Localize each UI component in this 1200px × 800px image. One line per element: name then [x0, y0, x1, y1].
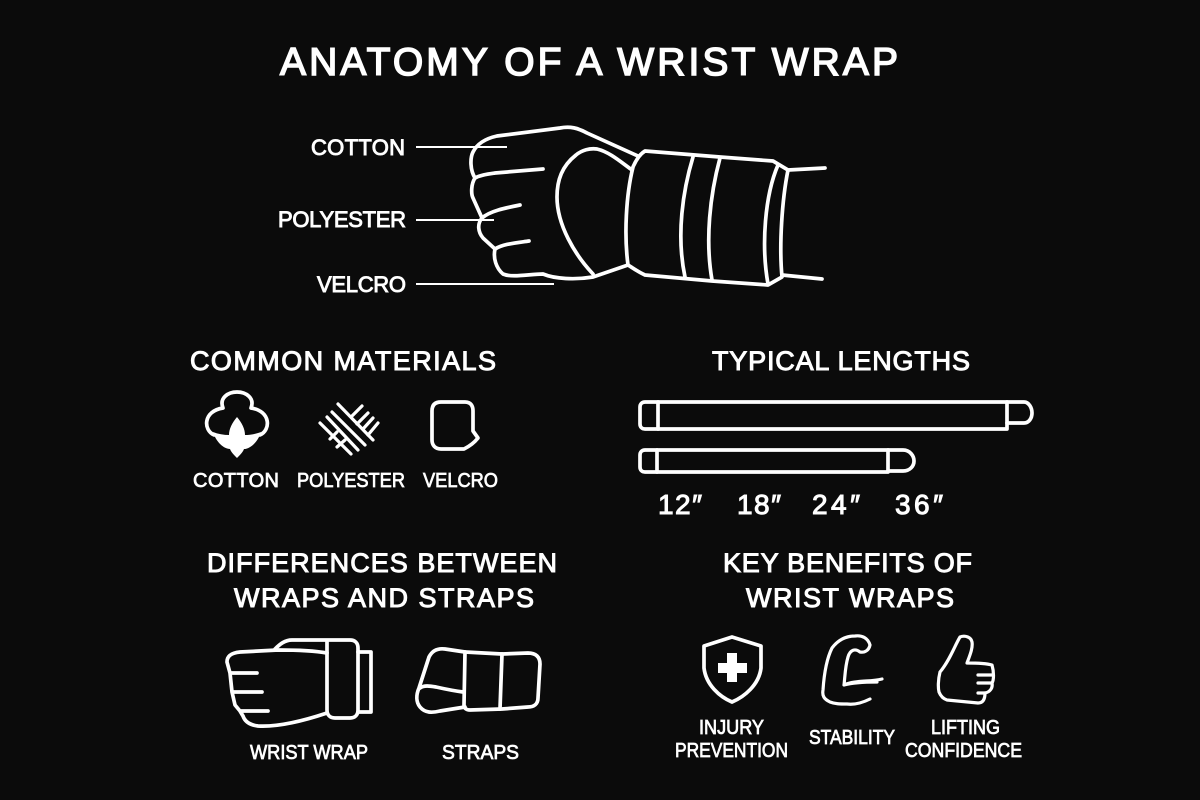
title: ANATOMY OF A WRIST WRAP: [280, 41, 898, 84]
heading: key benefits of wrist wraps: [723, 548, 972, 613]
label: straps: STRAPS: [442, 742, 519, 764]
icon: flexed arm: [823, 636, 882, 704]
label: polyester: POLYESTER: [278, 207, 406, 232]
icon: cotton boll: [207, 392, 267, 458]
icon: strap: [417, 649, 540, 712]
label: wrist wrap: WRIST WRAP: [250, 742, 368, 764]
label: lifting confidence: [905, 717, 1022, 762]
icon: long wrap: [640, 402, 1032, 429]
label: lifting confidence: CONFIDENCE: [905, 740, 1022, 762]
label: lengths: 12″: [658, 489, 702, 520]
heading: common materials: COMMON MATERIALS: [190, 346, 496, 376]
heading: differences between wraps and straps: [207, 548, 557, 613]
label: velcro: VELCRO: [317, 272, 406, 297]
label: velcro: VELCRO: [423, 470, 498, 492]
panel: wraps vs straps: [227, 640, 540, 764]
panel: common materials: [193, 392, 498, 492]
icon: short wrap: [640, 450, 914, 472]
label: lifting confidence: LIFTING: [931, 717, 1000, 739]
icon: wrapped fist: [471, 127, 825, 285]
icon: wrist wrap: [227, 640, 371, 726]
label: lengths: 18″: [737, 489, 781, 520]
icon: velcro patch: [432, 402, 478, 449]
icon: thumbs up: [938, 636, 994, 703]
heading: typical lengths: TYPICAL LENGTHS: [712, 346, 970, 376]
label: lengths: 24″: [812, 489, 860, 520]
heading: key benefits of wrist wraps: WRIST WRAPS: [746, 583, 954, 613]
panel: key benefits: [675, 636, 1022, 762]
heading: differences between wraps and straps: WRAPS AND STRAPS: [234, 583, 534, 613]
label: cotton: COTTON: [193, 470, 279, 492]
panel: hand anatomy diagram: [278, 127, 825, 297]
label: injury prevention: PREVENTION: [675, 740, 788, 762]
label: injury prevention: [675, 717, 788, 762]
label: polyester: POLYESTER: [297, 470, 405, 492]
label: stability: STABILITY: [809, 727, 895, 749]
icon: shield: [704, 637, 761, 702]
icon: polyester weave: [320, 404, 378, 454]
label: lengths: 36″: [895, 489, 943, 520]
heading: key benefits of wrist wraps: KEY BENEFITS OF: [723, 548, 972, 578]
heading: differences between wraps and straps: DIFFERENCES BETWEEN: [207, 548, 557, 578]
label: lengths: [658, 489, 943, 520]
label: injury prevention: INJURY: [699, 717, 764, 739]
panel: typical lengths: [640, 402, 1032, 520]
label: cotton: COTTON: [311, 135, 405, 160]
